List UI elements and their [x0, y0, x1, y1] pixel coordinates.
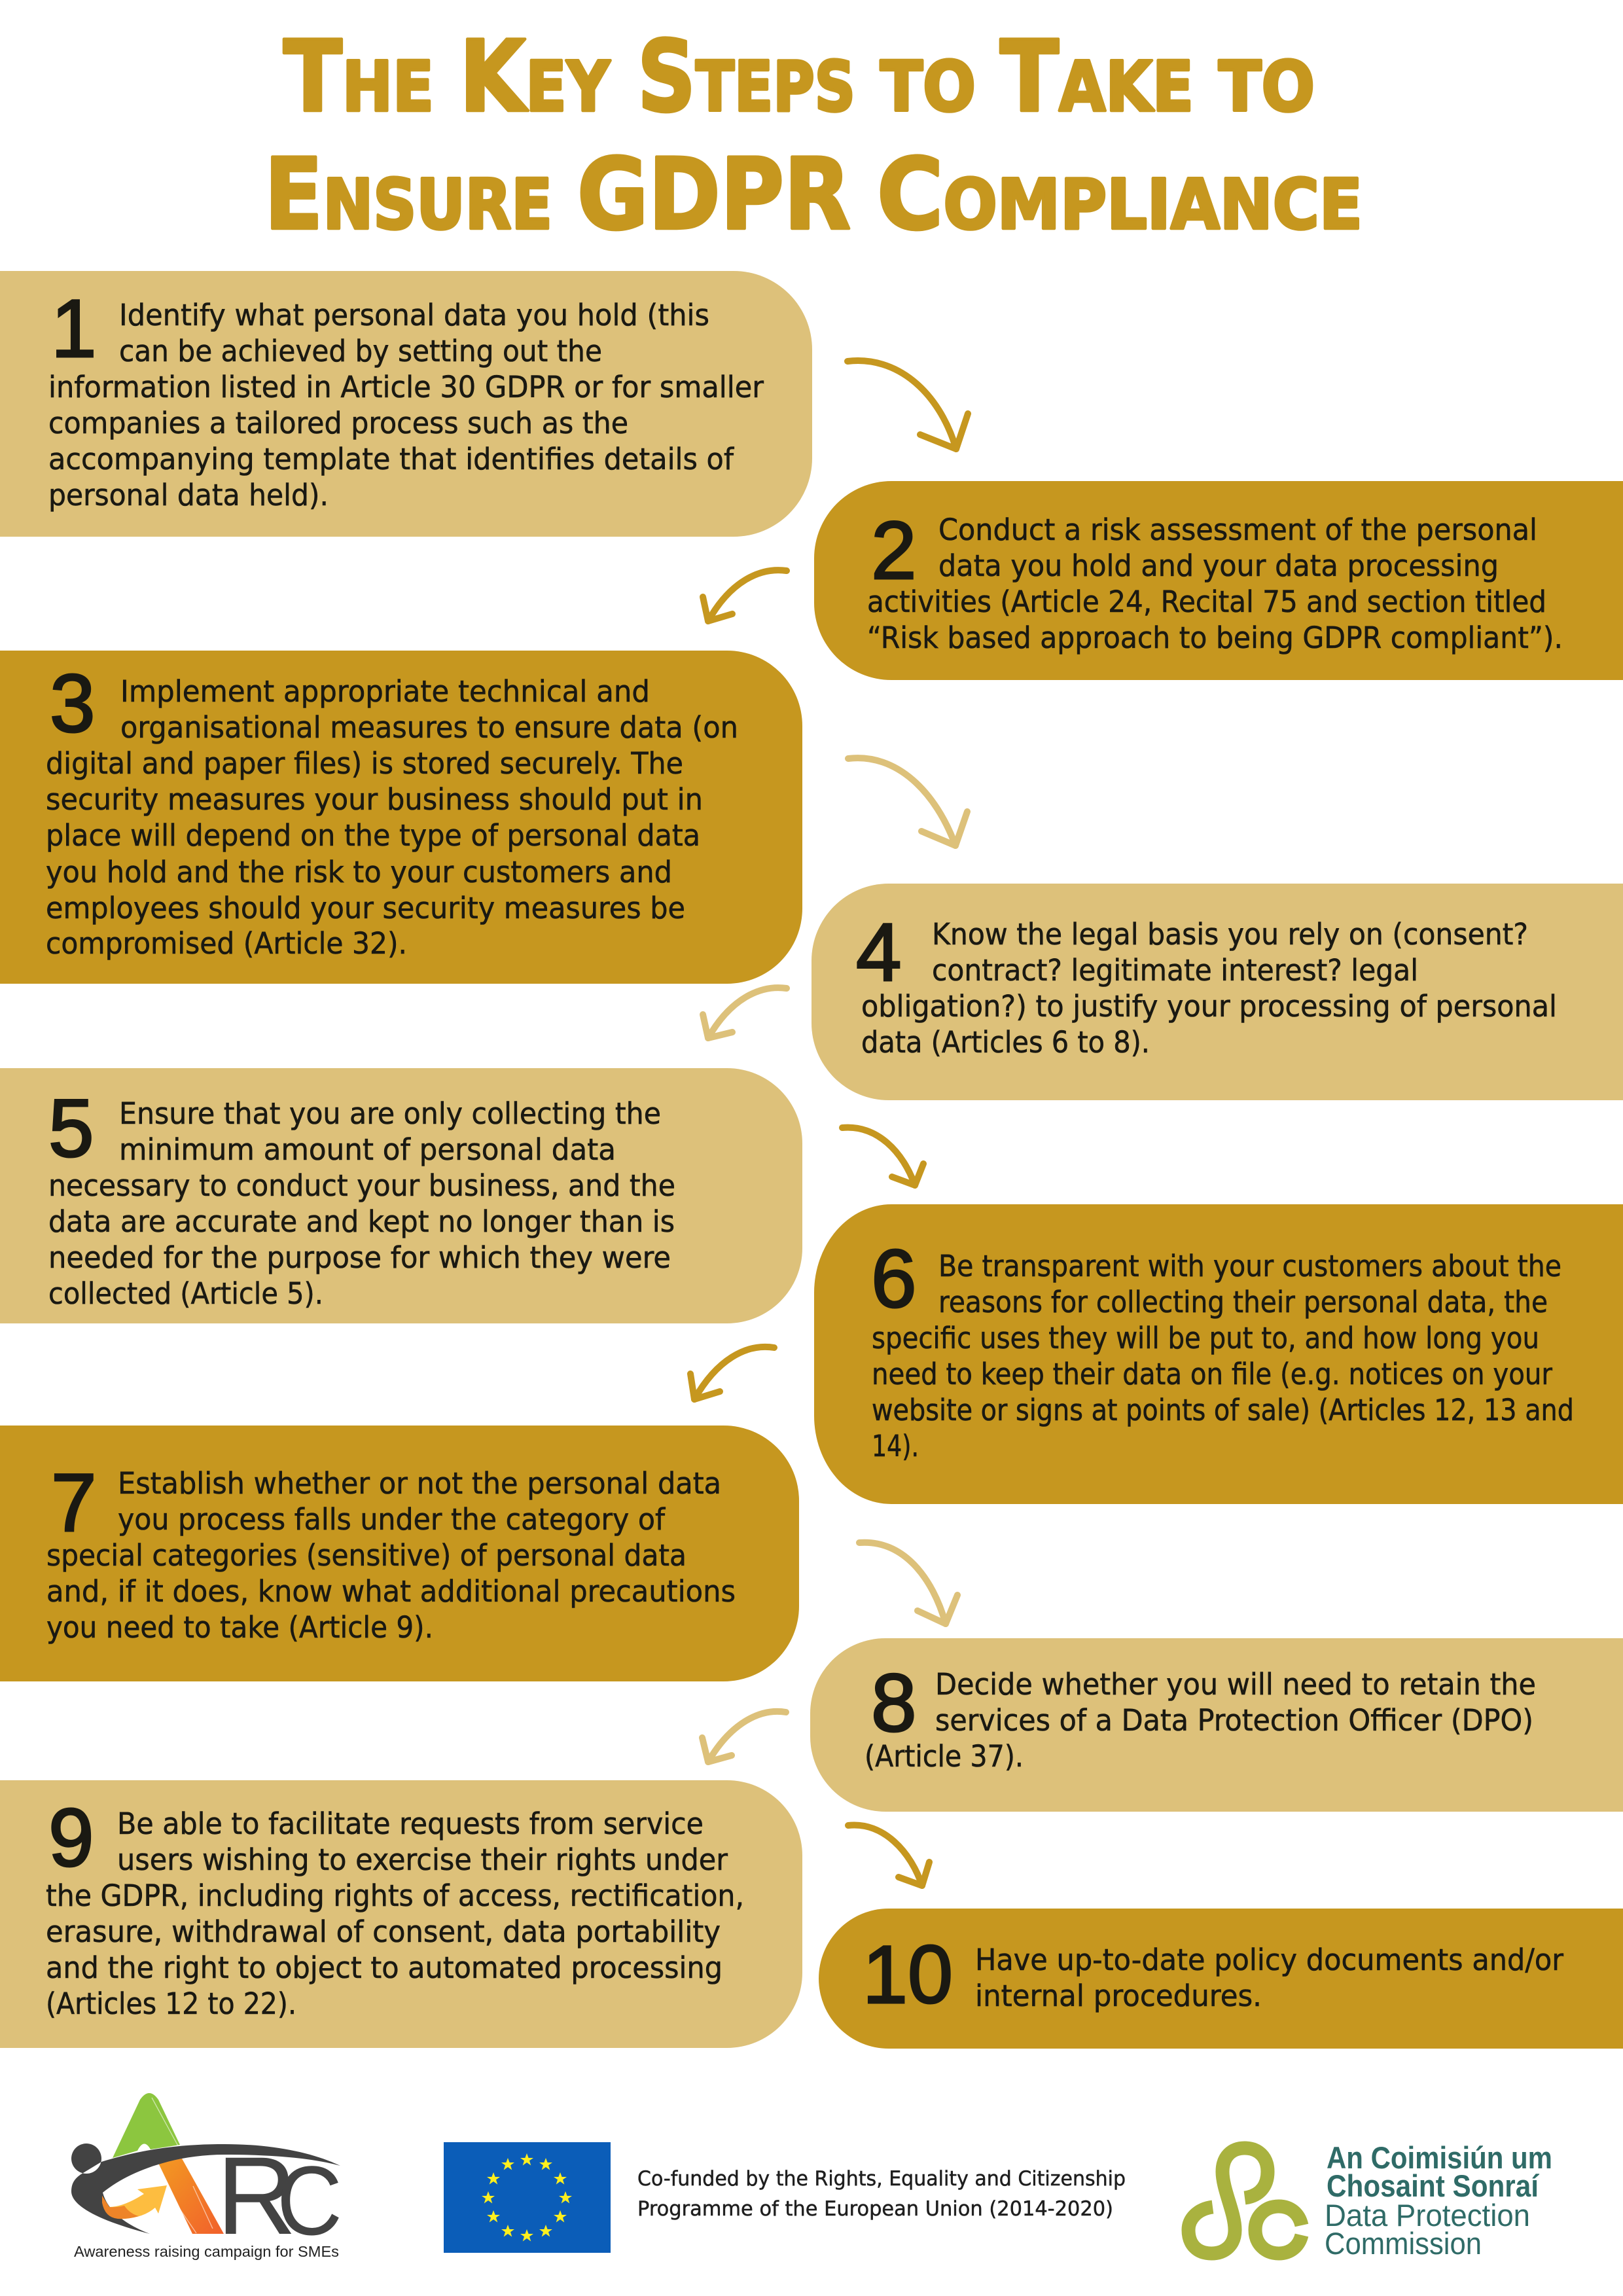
wordmark: Data Protection — [1325, 2198, 1530, 2233]
number 7: 7 — [51, 1458, 97, 1549]
number 9: 9 — [48, 1793, 94, 1884]
text: step 10: Have up-to-date policy documents and/or — [975, 1943, 1563, 1977]
text: step 3: digital and paper files) is stored securely. The — [46, 746, 683, 781]
logo: ARC: C — [277, 2145, 342, 2255]
number 4: 4 — [856, 907, 902, 998]
arrow: step 5 to 6 — [842, 1128, 923, 1185]
text: step 1: companies a tailored process such as the — [48, 406, 628, 440]
title: GDPR — [577, 138, 851, 252]
text: step 8 — [865, 1667, 1536, 1774]
arrow: step 1 to 2 — [847, 361, 968, 449]
title: TO — [1219, 47, 1315, 127]
number 10: 10 — [863, 1929, 953, 2020]
text: step 4: data (Articles 6 to 8). — [861, 1025, 1150, 1060]
title: TAKE — [1000, 20, 1194, 134]
wordmark: Commission — [1325, 2226, 1482, 2261]
text: step 9: Be able to facilitate requests from service — [117, 1806, 704, 1841]
title: THE — [283, 20, 434, 134]
text: step 7 — [46, 1466, 736, 1645]
title: KEY — [459, 20, 611, 134]
text: step 6: reasons for collecting their personal data, the — [938, 1285, 1548, 1319]
text: step 5: Ensure that you are only collecting the — [119, 1096, 661, 1131]
text: step 6: specific uses they will be put to, and how long you — [872, 1321, 1539, 1355]
text: step 1: information listed in Article 30 GDPR or for smaller — [48, 370, 764, 404]
text: step 8: (Article 37). — [865, 1739, 1024, 1774]
text: step 3 — [46, 674, 738, 961]
text: step 4: obligation?) to justify your processing of personal — [861, 989, 1557, 1024]
number 1: 1 — [51, 283, 97, 374]
yellow arrow — [102, 2185, 167, 2219]
text: step 8: services of a Data Protection Officer (DPO) — [935, 1703, 1533, 1738]
title: ENSURE — [264, 138, 552, 252]
icon: EU flag — [444, 2142, 611, 2253]
text: step 4: Know the legal basis you rely on (consent? — [932, 917, 1528, 952]
text: step 3: place will depend on the type of personal data — [46, 818, 700, 853]
text: step 1: Identify what personal data you hold (this — [119, 298, 709, 332]
letters RC: R — [217, 2134, 296, 2257]
text: step 5: minimum amount of personal data — [119, 1132, 616, 1167]
text: step 2 — [867, 512, 1563, 655]
title: TO — [880, 47, 976, 127]
number 5: 5 — [48, 1083, 94, 1174]
text: step 2: activities (Article 24, Recital 75 and section titled — [867, 584, 1546, 619]
grey swoosh — [71, 2144, 340, 2234]
text: co-funded statement — [637, 2167, 1126, 2221]
text: step 5: collected (Article 5). — [48, 1276, 323, 1311]
number 2: 2 — [871, 505, 917, 596]
text: step 6: Be transparent with your customers about the — [938, 1249, 1561, 1283]
text: step 1: can be achieved by setting out the — [119, 334, 602, 368]
arrow: step 8 to 9 — [702, 1712, 786, 1762]
arrow: step 4 to 5 — [703, 988, 787, 1038]
text: step 3: compromised (Article 32). — [46, 926, 407, 961]
text: step 10: internal procedures. — [975, 1979, 1262, 2013]
arrow: step 3 to 4 — [848, 758, 967, 846]
title — [264, 20, 1363, 252]
logo: ARC — [71, 2093, 342, 2260]
text: step 9: the GDPR, including rights of access, rectification, — [46, 1878, 744, 1913]
number 6: 6 — [871, 1234, 917, 1325]
text: step 3: you hold and the risk to your customers and — [46, 855, 672, 889]
text: step 4 — [861, 917, 1557, 1060]
panel: step 5 — [0, 1068, 802, 1323]
text: co-funded statement: Co-funded by the Rights, Equality and Citizenship — [637, 2167, 1126, 2191]
icon: triskele knot — [1188, 2148, 1302, 2253]
panel: step 1 — [0, 271, 812, 537]
text: step 2: data you hold and your data processing — [938, 548, 1499, 583]
panel: step 9 — [0, 1780, 802, 2048]
arrow: step 6 to 7 — [690, 1347, 774, 1399]
text: step 9: (Articles 12 to 22). — [46, 1986, 296, 2021]
text: step 7: you process falls under the category of — [118, 1502, 666, 1537]
text: step 10 — [975, 1943, 1563, 2013]
text: step 9: users wishing to exercise their rights under — [117, 1842, 728, 1877]
text: step 6 — [872, 1249, 1574, 1463]
text: step 7: you need to take (Article 9). — [46, 1610, 433, 1645]
text: co-funded statement: Programme of the European Union (2014-2020) — [637, 2197, 1113, 2221]
panel: step 10 — [819, 1909, 1623, 2049]
text: step 3: Implement appropriate technical and — [120, 674, 650, 709]
text: step 5: data are accurate and kept no longer than is — [48, 1204, 675, 1239]
text: step 9: erasure, withdrawal of consent, data portability — [46, 1914, 721, 1949]
text: step 9: and the right to object to automated processing — [46, 1950, 722, 1985]
arrow: step 7 to 8 — [859, 1543, 957, 1624]
text: step 5 — [48, 1096, 675, 1311]
text: step 6: 14). — [872, 1429, 919, 1463]
text: step 1: accompanying template that identifies details of — [48, 442, 734, 476]
tagline: Awareness raising campaign for SMEs — [74, 2243, 339, 2260]
text: step 3: employees should your security measures be — [46, 891, 685, 925]
text: step 1: personal data held). — [48, 478, 329, 512]
text: step 6: need to keep their data on file (e.g. notices on your — [872, 1357, 1552, 1391]
text: step 4: contract? legitimate interest? legal — [932, 953, 1418, 988]
number 3: 3 — [50, 658, 96, 749]
panel: step 3 — [0, 651, 802, 984]
text: step 7: special categories (sensitive) of personal data — [46, 1538, 687, 1573]
text: step 5: necessary to conduct your business, and the — [48, 1168, 675, 1203]
title: COMPLIANCE — [877, 138, 1363, 252]
panel: step 4 — [812, 884, 1623, 1100]
text: step 9 — [46, 1806, 744, 2021]
text: step 3: organisational measures to ensure data (on — [120, 710, 738, 745]
panel: step 8 — [810, 1638, 1623, 1812]
arrow: step 2 to 3 — [703, 570, 787, 621]
text: step 5: needed for the purpose for which they were — [48, 1240, 671, 1275]
text: step 1 — [48, 298, 764, 512]
number 8: 8 — [871, 1658, 917, 1749]
text: step 2: “Risk based approach to being GDPR compliant”). — [867, 620, 1563, 655]
orange A leg — [158, 2159, 224, 2234]
wordmark: An Coimisiún um — [1327, 2140, 1552, 2175]
text: step 2: Conduct a risk assessment of the personal — [938, 512, 1537, 547]
panel: step 7 — [0, 1426, 799, 1681]
wordmark — [1325, 2140, 1552, 2261]
wordmark: Chosaint Sonraí — [1327, 2168, 1540, 2203]
text: step 7: and, if it does, know what additional precautions — [46, 1574, 736, 1609]
text: step 8: Decide whether you will need to retain the — [935, 1667, 1536, 1702]
logo: Data Protection Commission — [1188, 2140, 1552, 2261]
text: step 7: Establish whether or not the personal data — [118, 1466, 721, 1501]
title: STEPS — [637, 20, 855, 134]
arrow: step 9 to 10 — [848, 1825, 929, 1886]
text: step 3: security measures your business should put in — [46, 782, 703, 817]
green A top — [113, 2093, 180, 2158]
panel: step 2 — [814, 481, 1623, 680]
panel: step 6 — [814, 1204, 1623, 1504]
